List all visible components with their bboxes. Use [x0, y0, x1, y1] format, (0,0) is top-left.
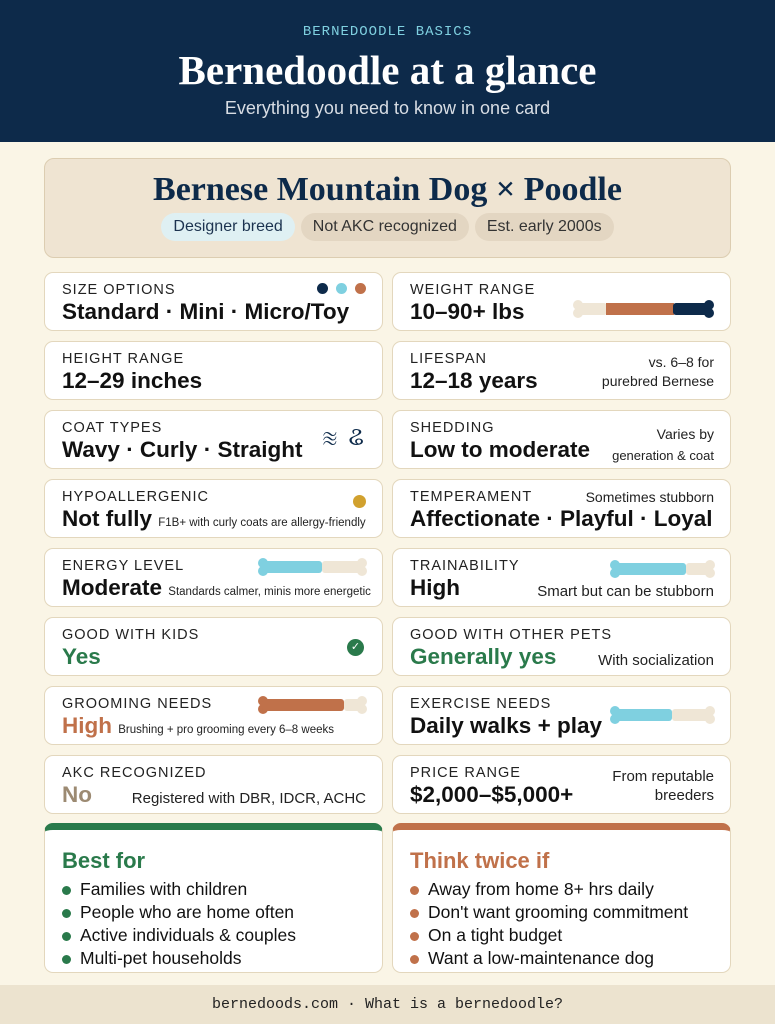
card: trainability: TRAINABILITY — [410, 558, 520, 574]
card: height range: 12–29 inches — [62, 368, 202, 393]
card: price range: $2,000–$5,000+ — [410, 782, 573, 807]
card: temperament: Affectionate · Playful · Loyal — [410, 506, 713, 531]
footer — [0, 985, 775, 1024]
card: energy level: Moderate Standards calmer, minis more energetic — [62, 575, 371, 600]
breed card: Bernese Mountain Dog × Poodle — [153, 171, 622, 208]
breed card: Est. early 2000s — [487, 218, 602, 235]
card: good with kids: ✓ — [351, 641, 360, 653]
header: BERNEDOODLE BASICS — [303, 24, 472, 40]
card: shedding: Varies by — [657, 426, 714, 442]
card: shedding: SHEDDING — [410, 420, 495, 436]
card: grooming needs: GROOMING NEEDS — [62, 696, 212, 712]
card: price range: breeders — [655, 787, 714, 804]
card: height range — [44, 341, 383, 400]
panel: best for: People who are home often — [80, 902, 294, 922]
panel: best for — [44, 823, 383, 973]
panel: think twice if — [392, 823, 731, 973]
card: price range: From reputable — [612, 768, 714, 785]
card: exercise needs: EXERCISE NEEDS — [410, 696, 551, 712]
card: good with kids: Yes — [62, 644, 101, 669]
card: good with other pets — [392, 617, 731, 676]
card: akc recognized: No — [62, 782, 92, 807]
breed card — [44, 158, 731, 258]
card: shedding: Low to moderate — [410, 437, 590, 462]
card: height range: HEIGHT RANGE — [62, 351, 184, 367]
card: hypoallergenic: HYPOALLERGENIC — [62, 489, 209, 505]
card: akc recognized: AKC RECOGNIZED — [62, 765, 207, 781]
card: trainability — [392, 548, 731, 607]
header — [0, 0, 775, 142]
card: lifespan — [392, 341, 731, 400]
card: akc recognized — [44, 755, 383, 814]
card: energy level — [44, 548, 383, 607]
card: weight range: WEIGHT RANGE — [410, 282, 535, 298]
card: shedding — [392, 410, 731, 469]
card: hypoallergenic — [44, 479, 383, 538]
card: good with other pets: GOOD WITH OTHER PETS — [410, 627, 612, 643]
card: energy level: ENERGY LEVEL — [62, 558, 184, 574]
card: shedding: generation & coat — [612, 448, 714, 463]
card: lifespan: purebred Bernese — [602, 373, 714, 389]
card: weight range: 10–90+ lbs — [410, 299, 524, 324]
card: price range: PRICE RANGE — [410, 765, 521, 781]
card: size options: SIZE OPTIONS — [62, 282, 176, 298]
card: good with other pets: Generally yes — [410, 644, 556, 669]
card: grooming needs: High Brushing + pro grooming every 6–8 weeks — [62, 713, 334, 738]
card: good with kids — [44, 617, 383, 676]
panel: think twice if: Think twice if — [410, 848, 549, 873]
card: size options — [44, 272, 383, 331]
card: akc recognized: Registered with DBR, IDCR, ACHC — [132, 790, 366, 807]
breed card: Not AKC recognized — [313, 218, 457, 235]
card: size options: Standard · Mini · Micro/Toy — [62, 299, 349, 324]
card: coat types — [44, 410, 383, 469]
card: grooming needs — [44, 686, 383, 745]
card: temperament — [392, 479, 731, 538]
card: lifespan: 12–18 years — [410, 368, 538, 393]
card: trainability: High — [410, 575, 460, 600]
panel: think twice if: On a tight budget — [428, 925, 562, 945]
card: good with other pets: With socialization — [598, 652, 714, 669]
card: lifespan: LIFESPAN — [410, 351, 487, 367]
panel: think twice if: Don't want grooming commitment — [428, 902, 688, 922]
panel: best for: Active individuals & couples — [80, 925, 296, 945]
panel: best for: Families with children — [80, 879, 247, 899]
card: lifespan: vs. 6–8 for — [649, 354, 714, 370]
panel: think twice if: Want a low-maintenance dog — [428, 948, 654, 968]
card: trainability: Smart but can be stubborn — [537, 583, 714, 600]
breed card: Designer breed — [173, 218, 283, 235]
card: hypoallergenic: Not fully F1B+ with curly coats are allergy-friendly — [62, 506, 366, 531]
card: price range — [392, 755, 731, 814]
card: good with kids: GOOD WITH KIDS — [62, 627, 199, 643]
header: Everything you need to know in one card — [225, 98, 550, 118]
card: exercise needs — [392, 686, 731, 745]
panel: think twice if: Away from home 8+ hrs daily — [428, 879, 654, 899]
footer: bernedoods.com · What is a bernedoodle? — [212, 996, 563, 1013]
card: weight range — [392, 272, 731, 331]
card: coat types: COAT TYPES — [62, 420, 162, 436]
card: temperament: TEMPERAMENT — [410, 489, 532, 505]
panel: best for: Multi-pet households — [80, 948, 241, 968]
card: coat types: ≋ ଌ — [322, 421, 366, 451]
panel: best for: Best for — [62, 848, 145, 873]
card: coat types: Wavy · Curly · Straight — [62, 437, 302, 462]
card: exercise needs: Daily walks + play — [410, 713, 602, 738]
card: temperament: Sometimes stubborn — [586, 489, 714, 505]
header: Bernedoodle at a glance — [179, 47, 596, 93]
